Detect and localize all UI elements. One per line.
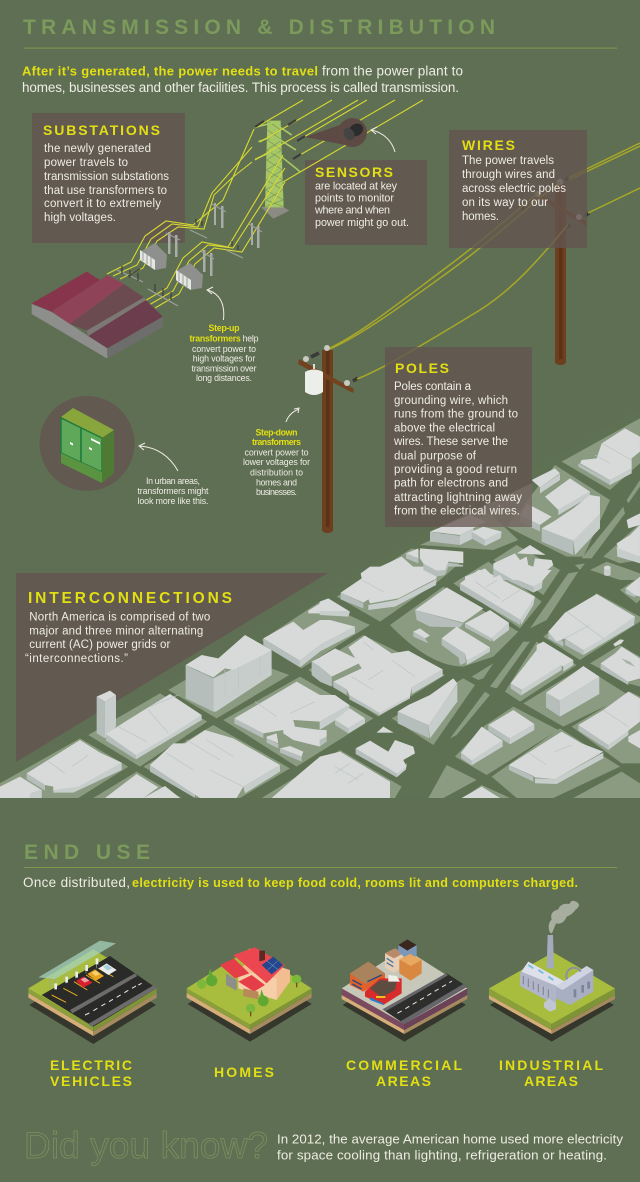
power plant building: [32, 272, 163, 359]
panel: substations: power travels to: [44, 157, 128, 169]
wires between poles: [330, 143, 640, 379]
arrow: step-down: [286, 408, 299, 422]
city blocks: east: [337, 545, 640, 798]
panel: substations: high voltages.: [44, 212, 116, 224]
intro text: [22, 64, 463, 95]
panel: interconnections: INTERCONNECTIONS: [28, 590, 232, 607]
label: electric vehicles: ELECTRIC: [50, 1057, 132, 1073]
text: step-down transformers: transformers: [252, 437, 301, 447]
label: industrial areas: [499, 1057, 603, 1089]
panel: poles: above the electrical: [394, 423, 495, 435]
text: urban transformers: look more like this.: [138, 496, 208, 506]
text: step-down transformers: businesses.: [256, 487, 297, 497]
panel: wires: on its way to our: [462, 197, 548, 209]
panel: poles: attracting lightning away: [394, 492, 522, 504]
icon: urban transformer cabinet: [40, 396, 134, 491]
label: commercial areas: AREAS: [376, 1073, 431, 1089]
icon: electric vehicles tile: [28, 941, 157, 1044]
power lines from substation to tower: [107, 100, 423, 308]
panel: substations: transmission substations: [44, 171, 169, 183]
text: step-up transformers: convert power to: [192, 344, 256, 354]
panel: sensors: where and when: [314, 205, 390, 217]
panel: poles: providing a good return: [394, 464, 517, 476]
city blocks: north: [420, 418, 640, 580]
city buildings: north: [380, 428, 640, 580]
did you know fact: [277, 1132, 623, 1162]
text: step-up transformers: transmission over: [192, 364, 257, 374]
intro text: homes, businesses and other facilities. This process is called transmission.: [22, 80, 459, 95]
end use intro: Once distributed,: [23, 875, 130, 890]
label: homes: HOMES: [214, 1064, 274, 1080]
panel: poles: wires. These serve the: [393, 436, 508, 448]
text: step-up transformers: [190, 323, 259, 383]
panel: interconnections: “interconnections.”: [25, 653, 128, 665]
text: step-down transformers: convert power to: [244, 448, 309, 458]
icon: commercial areas tile: [342, 939, 467, 1042]
panel: interconnections: current (AC) power grids or: [29, 639, 170, 651]
text: step-down transformers: lower voltages for: [243, 457, 310, 467]
panel: substations: that use transformers to: [44, 185, 167, 197]
label: industrial areas: INDUSTRIAL: [499, 1057, 603, 1073]
text: step-up transformers: transformers help: [190, 334, 259, 344]
icon: homes tile: [187, 947, 312, 1042]
icon: industrial areas tile: [489, 901, 615, 1042]
city buildings: west: [0, 603, 320, 798]
panel: interconnections: [16, 573, 328, 762]
panel: poles: dual purpose of: [394, 450, 477, 462]
panel: wires: [449, 130, 587, 248]
pole: left with step-down transformer: [298, 345, 358, 533]
icon: sensor callout: [305, 118, 367, 147]
panel: substations: convert it to extremely: [44, 198, 161, 210]
arrow: sensors: [371, 127, 395, 152]
text: step-down transformers: [243, 428, 310, 497]
text: step-up transformers: long distances.: [196, 373, 252, 383]
panel: wires: WIRES: [462, 137, 515, 153]
panel: sensors: points to monitor: [315, 193, 394, 205]
text: step-down transformers: Step-down: [256, 428, 298, 438]
panel: interconnections: major and three minor alternating: [29, 626, 203, 638]
text: step-up transformers: Step-up: [208, 323, 240, 333]
city buildings: east: [320, 567, 640, 798]
substation gantries: [117, 203, 262, 306]
arrow: step-up: [207, 287, 224, 320]
panel: sensors: SENSORS: [315, 164, 393, 180]
label: electric vehicles: VEHICLES: [50, 1073, 132, 1089]
panel: sensors: are located at key: [315, 180, 398, 192]
panel: wires: across electric poles: [462, 183, 566, 195]
panel: substations: the newly generated: [44, 143, 151, 155]
label: commercial areas: [346, 1057, 462, 1089]
panel: interconnections: North America is comprised of two: [29, 612, 210, 624]
text: step-down transformers: distribution to: [250, 468, 303, 478]
panel: substations: [32, 113, 185, 243]
did you know fact: In 2012, the average American home used more electricity: [277, 1132, 623, 1146]
city blocks: west: [0, 602, 445, 798]
heading: end use: END USE: [24, 841, 150, 864]
label: industrial areas: AREAS: [524, 1073, 578, 1089]
panel: sensors: [305, 160, 427, 245]
pole: right: [521, 177, 589, 365]
panel: sensors: power might go out.: [315, 217, 409, 229]
panel: poles: POLES: [395, 360, 449, 376]
text: urban transformers: [138, 476, 209, 506]
text: step-down transformers: homes and: [256, 478, 297, 488]
did you know heading: Did you know?: [24, 1125, 268, 1166]
step-up transformers: [140, 243, 203, 290]
panel: poles: path for electrons and: [394, 478, 508, 490]
panel: poles: [385, 347, 532, 527]
transmission tower: [255, 121, 300, 219]
panel: poles: grounding wire, which: [394, 395, 508, 407]
intro text: After it’s generated, the power needs to travel: [22, 64, 318, 78]
panel: wires: through wires and: [462, 169, 555, 181]
did you know fact: for space cooling than lighting, refrigeration or heating.: [277, 1148, 607, 1162]
panel: wires: The power travels: [462, 155, 554, 167]
text: urban transformers: In urban areas,: [146, 476, 200, 486]
end use intro: electricity is used to keep food cold, rooms lit and computers charged.: [132, 876, 578, 890]
arrow: urban transformer: [139, 443, 178, 471]
panel: poles: from the electrical wires.: [394, 505, 520, 517]
city map: [0, 418, 640, 798]
panel: poles: Poles contain a: [394, 381, 472, 393]
panel: poles: runs from the ground to: [394, 408, 518, 420]
label: commercial areas: COMMERCIAL: [346, 1057, 462, 1073]
panel: substations: SUBSTATIONS: [43, 122, 160, 138]
label: electric vehicles: [50, 1057, 132, 1089]
panel: wires: homes.: [462, 211, 499, 223]
text: step-up transformers: high voltages for: [193, 354, 255, 364]
text: urban transformers: transformers might: [138, 486, 209, 496]
intro text: from the power plant to: [322, 64, 463, 78]
city ground: [0, 408, 640, 798]
title: TRANSMISSION & DISTRIBUTION: [23, 16, 495, 39]
